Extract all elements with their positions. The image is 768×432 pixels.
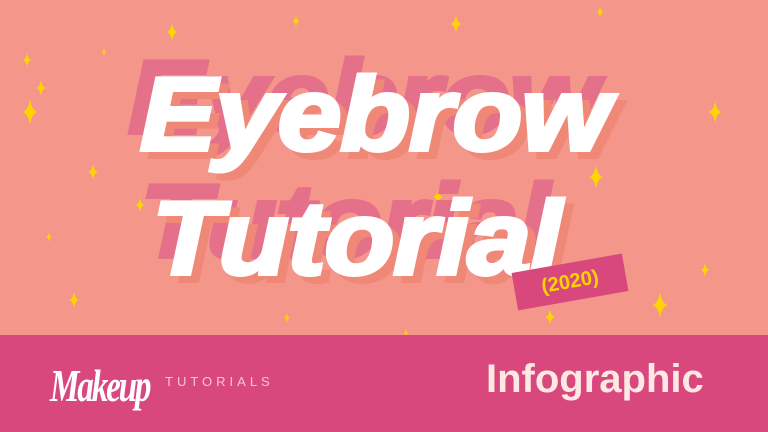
sparkles background	[22, 6, 722, 335]
title shadow: pink: Eyebrow	[128, 40, 597, 156]
title: Eyebrow	[140, 57, 609, 173]
year tag (2020)	[512, 254, 628, 310]
logo: Makeup Tutorials	[50, 360, 274, 411]
year tag (2020): (2020)	[540, 266, 600, 298]
footer bar	[0, 335, 768, 432]
title: Tutorial	[152, 181, 561, 297]
title shadow: salmon: Eyebrow	[148, 64, 617, 180]
label: Infographic: Infographic	[486, 357, 704, 401]
logo: Makeup Tutorials: Makeup	[50, 360, 149, 411]
title shadow: salmon: Tutorial	[160, 188, 569, 304]
title shadow: salmon	[148, 64, 628, 304]
title shadow: pink: Tutorial	[140, 164, 549, 280]
logo: Makeup Tutorials: TUTORIALS	[165, 374, 274, 389]
title shadow: pink	[127, 40, 608, 280]
title	[139, 57, 620, 297]
